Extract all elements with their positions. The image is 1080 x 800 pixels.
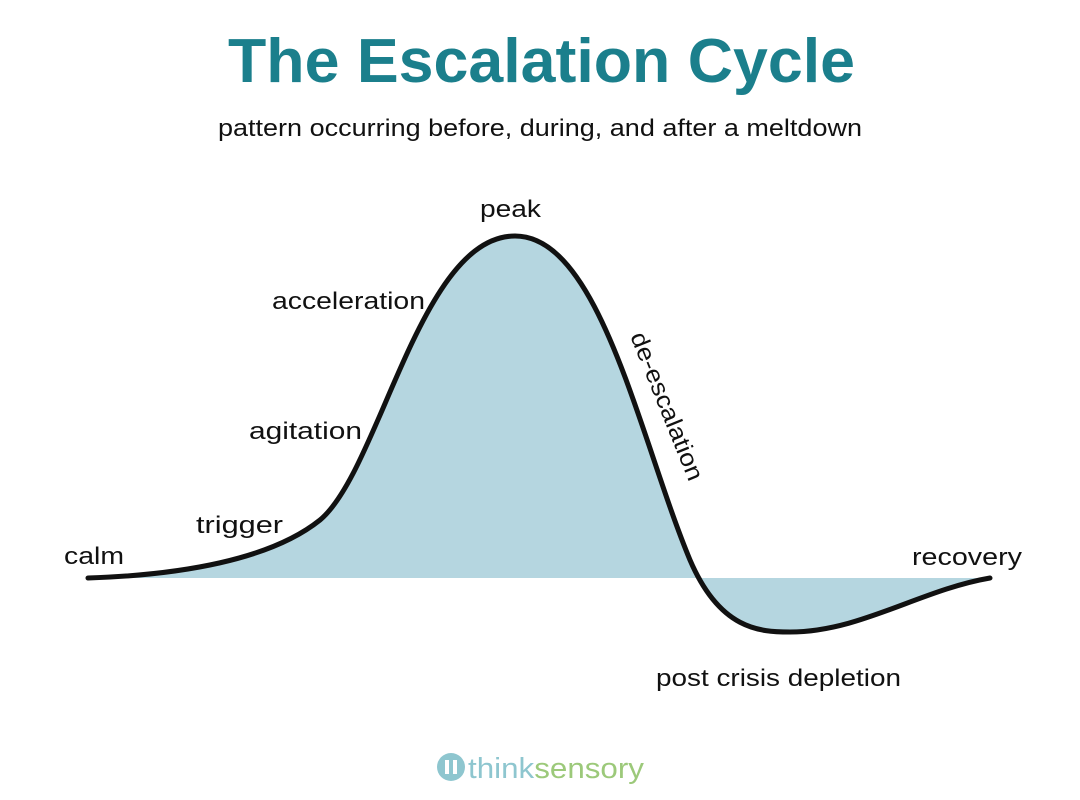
label: calm: calm bbox=[64, 543, 124, 570]
title: The Escalation Cycle bbox=[228, 27, 855, 96]
label: agitation: agitation bbox=[249, 418, 362, 445]
label: peak: peak bbox=[480, 196, 542, 223]
chart: escalation curve bbox=[88, 236, 990, 632]
label: acceleration: acceleration bbox=[272, 288, 425, 315]
subtitle: pattern occurring before, during, and after a meltdown bbox=[218, 115, 862, 142]
label: de-escalation: de-escalation bbox=[624, 328, 709, 485]
label: trigger: trigger bbox=[196, 512, 283, 539]
logo: thinksensory: thinksensory bbox=[468, 753, 645, 785]
label: post crisis depletion: post crisis depletion bbox=[656, 665, 901, 692]
label: recovery: recovery bbox=[912, 544, 1022, 571]
